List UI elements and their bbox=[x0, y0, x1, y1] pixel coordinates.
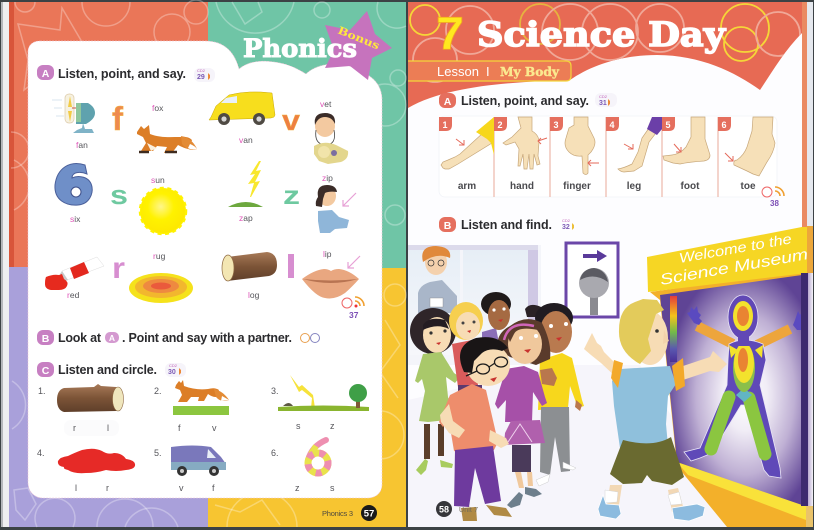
sign: welcome to the science museum: Welcome to the bbox=[678, 230, 793, 266]
exercise 3: lightning: s bbox=[296, 421, 301, 431]
heading: section B left bbox=[37, 330, 320, 345]
card: toe: 6 bbox=[721, 120, 727, 130]
label: six: six bbox=[70, 214, 81, 224]
exercise 4: puddle: l bbox=[75, 483, 77, 493]
card: leg: leg bbox=[627, 181, 641, 192]
label: van: van bbox=[239, 135, 253, 145]
panel: museum scene background bbox=[408, 245, 740, 527]
exercise 4: puddle bbox=[37, 448, 135, 493]
label: rug: rug bbox=[153, 251, 166, 261]
label: fan: fan bbox=[76, 140, 88, 150]
heading: section B left: . Point and say with a partner. bbox=[122, 331, 292, 345]
heading: section C left bbox=[37, 362, 186, 377]
character: blond girl bbox=[449, 302, 483, 400]
character: main boy bbox=[584, 299, 727, 521]
card: leg bbox=[606, 117, 662, 192]
title: 7 Science Day bbox=[436, 7, 726, 59]
icon: vet with dog bbox=[314, 113, 348, 164]
heading: section C left: C bbox=[42, 365, 50, 377]
character: dark haired boy bbox=[481, 292, 511, 364]
icon: audio track 29: CD2 bbox=[197, 68, 206, 73]
heading: section B right: B bbox=[444, 220, 452, 232]
exercise 1: log bbox=[38, 384, 124, 436]
museum wall frame bbox=[650, 270, 806, 527]
label: vet: vet bbox=[320, 99, 332, 109]
card: foot bbox=[662, 117, 710, 192]
heading: section A left: A bbox=[42, 68, 50, 80]
panel: phonics white card bbox=[28, 41, 382, 498]
heading: section A right: Listen, point, and say. bbox=[461, 94, 589, 108]
icon: bonus star bbox=[325, 11, 392, 80]
base: yellow step bbox=[677, 462, 806, 520]
letter r: r bbox=[112, 252, 125, 285]
heading: section C left: Listen and circle. bbox=[58, 363, 157, 377]
exercise 5: purple van: v bbox=[179, 483, 184, 493]
card: finger bbox=[550, 117, 599, 192]
exercise 3: lightning bbox=[271, 375, 369, 431]
icon: track 38 bbox=[762, 187, 784, 208]
panel: thermal screen bbox=[660, 275, 802, 505]
icon: audio track 31: CD2 bbox=[599, 94, 608, 99]
label: log: log bbox=[248, 290, 260, 300]
exercise 4: puddle: r bbox=[106, 483, 109, 493]
icon: audio track 30 bbox=[165, 363, 186, 377]
exercise 5: purple van bbox=[154, 446, 226, 493]
heading: section A right bbox=[439, 93, 617, 108]
icon: yellow van bbox=[209, 92, 275, 125]
label: zap: zap bbox=[239, 213, 253, 223]
icon: rug bbox=[129, 273, 193, 303]
letter z: z bbox=[283, 180, 300, 210]
card: arm: 1 bbox=[442, 120, 448, 130]
icon: number six bbox=[55, 164, 92, 205]
character: teacher bbox=[418, 246, 457, 313]
icon: track 38: 38 bbox=[770, 199, 779, 208]
character: girl in yellow top bbox=[525, 303, 584, 486]
title: Phonics with bonus star: Phonics bbox=[243, 34, 357, 63]
exercise 6: striped six bbox=[271, 440, 335, 493]
icon: fox bbox=[137, 125, 197, 153]
card: leg: 4 bbox=[609, 120, 615, 130]
card: toe bbox=[718, 117, 775, 192]
exercise 6: striped six: z bbox=[295, 483, 300, 493]
card: arm bbox=[439, 117, 494, 192]
letter f: f bbox=[112, 100, 124, 137]
card: finger: 3 bbox=[553, 120, 559, 130]
letter s: s bbox=[110, 180, 128, 210]
exercise 5: purple van: 5. bbox=[154, 448, 162, 458]
heading: section B left: A bbox=[109, 333, 115, 343]
page footer: 58: 58 bbox=[439, 504, 449, 514]
icon: audio track 30: CD2 bbox=[169, 363, 178, 368]
icon: track 37: 37 bbox=[349, 310, 359, 320]
card: arm: arm bbox=[458, 181, 476, 192]
icon: audio track 32: CD2 bbox=[562, 218, 571, 223]
icon: lightning on grass bbox=[228, 161, 263, 207]
sign: welcome to the science museum: Science Museum bbox=[659, 246, 810, 289]
thermal body figure bbox=[684, 295, 802, 478]
page footer: 57: 57 bbox=[364, 508, 374, 520]
lesson tag: My Body bbox=[500, 65, 560, 79]
lesson tag: Lesson bbox=[437, 64, 479, 79]
character: girl with pink hairband bbox=[495, 319, 550, 508]
label: lip: lip bbox=[323, 249, 332, 259]
lesson tag: I bbox=[486, 64, 490, 79]
label: fox: fox bbox=[152, 103, 164, 113]
heading: section B right bbox=[439, 217, 574, 232]
label: sun: sun bbox=[151, 175, 165, 185]
letter l bbox=[288, 254, 294, 278]
exercise 6: striped six: s bbox=[330, 483, 335, 493]
icon: audio track 32 bbox=[562, 218, 574, 231]
label: zip: zip bbox=[322, 173, 333, 183]
title: 7 Science Day: 7 bbox=[436, 7, 464, 59]
panel: red title banner bbox=[408, 2, 802, 108]
card: hand bbox=[494, 117, 547, 192]
page footer: 58: Unit 7 bbox=[459, 507, 478, 514]
icon: partner faces bbox=[300, 334, 320, 342]
icon: audio track 30: 30 bbox=[168, 369, 176, 376]
exercise 2: fox bbox=[154, 380, 229, 433]
sign: welcome to the science museum bbox=[647, 226, 810, 292]
panel: body parts strip bbox=[439, 116, 777, 197]
exercise 3: lightning: 3. bbox=[271, 386, 279, 396]
heading: section B left: Look at bbox=[58, 331, 102, 345]
exercise 5: purple van: f bbox=[212, 483, 215, 493]
heading: section A left bbox=[37, 65, 215, 82]
card: hand: hand bbox=[510, 181, 534, 192]
icon: log bbox=[222, 252, 277, 281]
title: 7 Science Day: Science Day bbox=[477, 15, 726, 55]
icon: audio track 32: 32 bbox=[562, 224, 570, 231]
exercise 1: log: 1. bbox=[38, 386, 46, 396]
sign: purple arrow exhibit bbox=[566, 243, 618, 317]
heading: section B right: Listen and find. bbox=[461, 218, 552, 232]
card: hand: 2 bbox=[497, 120, 503, 130]
page footer: 57 bbox=[322, 505, 377, 521]
panel: left page background bbox=[1, 0, 406, 527]
page footer: 57: Phonics 3 bbox=[322, 509, 353, 518]
exercise 2: fox: 2. bbox=[154, 386, 162, 396]
lesson tag bbox=[408, 61, 571, 81]
exercise 1: log: l bbox=[107, 423, 109, 433]
exercise 1: log: r bbox=[73, 423, 76, 433]
label: red: red bbox=[67, 290, 80, 300]
icon: lips bbox=[302, 256, 360, 298]
icon: track 37 bbox=[342, 297, 364, 320]
icon: red paint tube bbox=[45, 257, 104, 290]
book spine edge bbox=[801, 0, 814, 530]
letter v: v bbox=[282, 105, 300, 137]
heading: section B left: B bbox=[42, 333, 50, 345]
icon: sun bbox=[140, 188, 186, 234]
icon: fan bbox=[52, 94, 95, 133]
card: foot: 5 bbox=[665, 120, 671, 130]
heading: section A right: A bbox=[444, 96, 452, 108]
icon: audio track 31 bbox=[595, 93, 617, 107]
title: Phonics with bonus star bbox=[243, 11, 392, 80]
exercise 2: fox: v bbox=[212, 423, 217, 433]
exercise 3: lightning: z bbox=[330, 421, 335, 431]
character: girl in green dress bbox=[410, 308, 460, 475]
character: boy with glasses bbox=[439, 337, 512, 521]
exercise 2: fox: f bbox=[178, 423, 181, 433]
icon: audio track 29: 29 bbox=[197, 74, 205, 81]
title: Phonics with bonus star: Bonus bbox=[336, 25, 381, 52]
exercise 6: striped six: 6. bbox=[271, 448, 279, 458]
icon: audio track 31: 31 bbox=[599, 100, 607, 107]
card: toe: toe bbox=[740, 181, 756, 192]
heading: section A left: Listen, point, and say. bbox=[58, 67, 186, 81]
panel: right page background bbox=[408, 2, 813, 527]
card: foot: foot bbox=[681, 181, 700, 192]
icon: audio track 29 bbox=[194, 68, 215, 82]
icon: girl pointing to zip bbox=[316, 185, 356, 233]
exercise 4: puddle: 4. bbox=[37, 448, 45, 458]
page footer: 58 bbox=[436, 501, 478, 517]
card: finger: finger bbox=[563, 181, 591, 192]
